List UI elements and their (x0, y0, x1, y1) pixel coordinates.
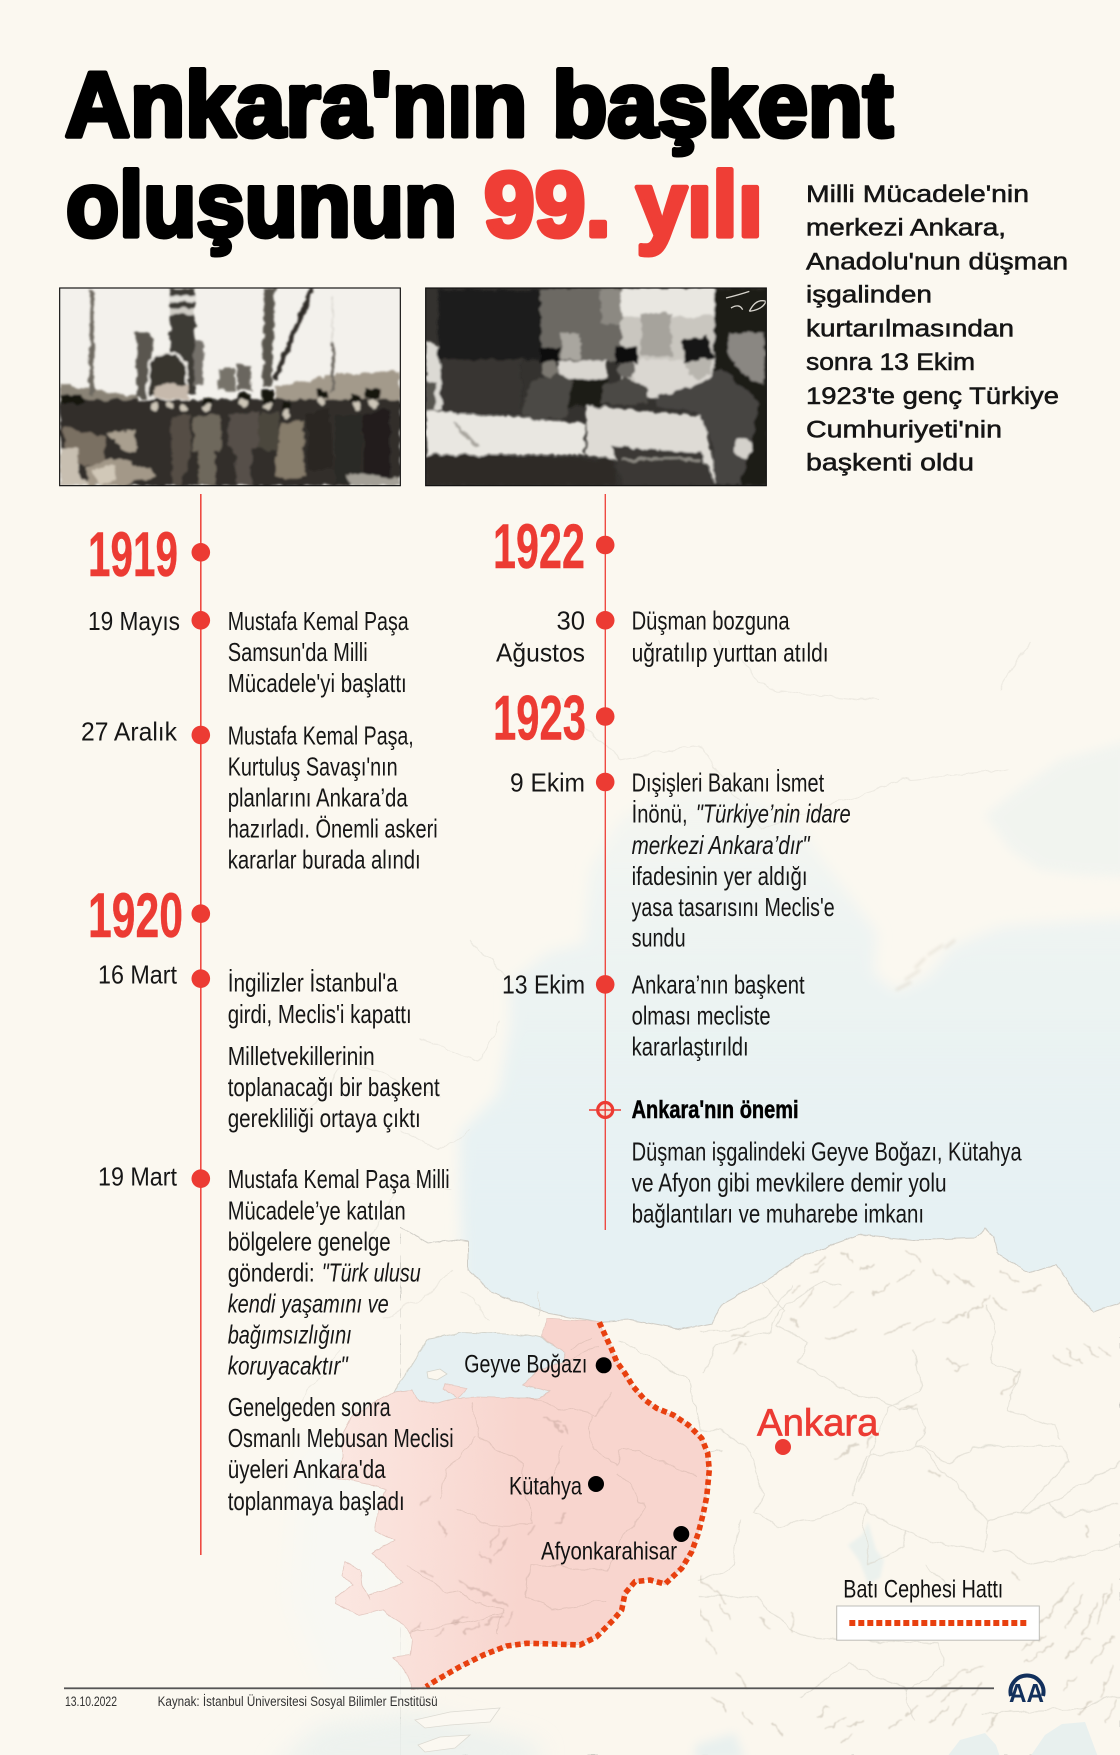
event: 19 Mayıs: Mücadele'yi başlattı (228, 668, 407, 698)
callout: Ankara'nın önemi (632, 1096, 1022, 1229)
land: Turkey (400, 1227, 1120, 1755)
title line 2: oluşunun (66, 154, 457, 256)
sea: Mediterranean (270, 1712, 1098, 1755)
event: 19 Mart: bağımsızlığını (228, 1320, 352, 1350)
title line 1: Ankara'nın başkent (65, 54, 893, 156)
event: 9 Ekim: sundu (632, 923, 686, 953)
event: 16 Mart: Milletvekillerinin (228, 1041, 375, 1071)
event: 13 Ekim: olması mecliste (632, 1000, 771, 1030)
event: 19 Mart: "Türk ulusu (322, 1257, 421, 1287)
event: 9 Ekim: "Türkiye’nin idare (696, 799, 851, 829)
event: 19 Mayıs (88, 606, 409, 698)
intro text: Cumhuriyeti'nin (806, 416, 1002, 443)
city: Afyonkarahisar (541, 1526, 689, 1565)
occupied territory (335, 1318, 709, 1690)
intro text: başkenti oldu (806, 450, 974, 477)
timeline left (81, 494, 454, 1555)
city: Ankara: Ankara (757, 1402, 879, 1444)
event: 9 Ekim (510, 768, 851, 953)
city: Afyonkarahisar: Afyonkarahisar (541, 1537, 677, 1565)
intro text: kurtarılmasından (806, 316, 1014, 343)
intro text: merkezi Ankara, (806, 215, 1006, 242)
sea: Aegean (290, 1440, 420, 1700)
intro text (806, 181, 1068, 477)
event: 19 Mart: Mustafa Kemal Paşa Milli (228, 1164, 450, 1194)
timeline axis (200, 494, 202, 1555)
footer date: 13.10.2022 (65, 1694, 117, 1709)
event: 19 Mart: bölgelere genelge (228, 1226, 391, 1256)
legend: Batı Cephesi Hattı (843, 1575, 1003, 1603)
event: 19 Mart: gönderdi: (228, 1257, 315, 1287)
event: 27 Aralık: hazırladı. Önemli askeri (228, 814, 438, 844)
event: 19 Mart: Genelgeden sonra (228, 1392, 391, 1422)
event: 19 Mart (98, 1161, 454, 1516)
event: 27 Aralık (81, 717, 438, 875)
event: 19 Mart: toplanmaya başladı (228, 1486, 405, 1516)
event: 30 Ağustos: 30 (556, 606, 585, 636)
icon: target marker (589, 1102, 621, 1118)
event: 27 Aralık: kararlar burada alındı (228, 845, 421, 875)
event: 30 Ağustos (496, 606, 829, 667)
intro text: Anadolu'nun düşman (806, 248, 1068, 275)
intro text: sonra 13 Ekim (806, 349, 975, 376)
region fill (335, 1318, 709, 1690)
terrain: Crimea (896, 940, 955, 990)
event: 16 Mart: gerekliliği ortaya çıktı (228, 1103, 421, 1133)
sea: Azov (985, 740, 1120, 877)
event: 9 Ekim: yasa tasarısını Meclis'e (632, 892, 835, 922)
event: 9 Ekim: 9 Ekim (510, 768, 585, 798)
event: 16 Mart (98, 959, 440, 1133)
event: 9 Ekim: merkezi Ankara’dır" (632, 830, 811, 860)
event: 16 Mart: İngilizler İstanbul'a (228, 968, 398, 998)
map background (270, 640, 1120, 1755)
event: 9 Ekim: ifadesinin yer aldığı (632, 861, 808, 891)
callout: Ankara'nın önemi: bağlantıları ve muharebe imkanı (632, 1199, 924, 1229)
legend (837, 1575, 1039, 1640)
year 1919: 1919 (88, 520, 178, 590)
footer rule (64, 1687, 994, 1689)
event: 19 Mart: 19 Mart (98, 1161, 178, 1191)
event: 13 Ekim: kararlaştırıldı (632, 1032, 749, 1062)
event: 19 Mart: Osmanlı Mebusan Meclisi (228, 1423, 454, 1453)
event: 30 Ağustos: Düşman bozguna (632, 606, 790, 636)
callout: Ankara'nın önemi: ve Afyon gibi mevkilere demir yolu (632, 1168, 947, 1198)
event: 13 Ekim: 13 Ekim (502, 969, 585, 999)
timeline right (493, 494, 1022, 1230)
photo: meeting at table (426, 288, 768, 486)
event: 30 Ağustos: uğratılıp yurttan atıldı (632, 637, 829, 667)
intro text: işgalinden (806, 282, 932, 309)
sea: Marmara (393, 1332, 565, 1403)
event: 19 Mart: Mücadele’ye katılan (228, 1195, 406, 1225)
event: 13 Ekim (502, 969, 805, 1062)
logo: AA: AA (1009, 1678, 1044, 1708)
islands (415, 1708, 500, 1752)
event: 19 Mayıs: 19 Mayıs (88, 606, 180, 636)
borders (300, 640, 1120, 1723)
terrain relief (700, 1250, 1117, 1743)
city: Kütahya: Kütahya (509, 1473, 582, 1501)
coast islands (427, 1369, 447, 1380)
event: 27 Aralık: 27 Aralık (81, 717, 178, 747)
front line: Batı Cephesi (426, 1322, 709, 1687)
event: 16 Mart: 16 Mart (98, 959, 178, 989)
callout: Ankara'nın önemi: Ankara'nın önemi (632, 1096, 799, 1124)
event: 27 Aralık: Kurtuluş Savaşı'nın (228, 751, 398, 781)
year 1920: 1920 (88, 881, 183, 951)
event: 19 Mart: üyeleri Ankara'da (228, 1454, 386, 1484)
title highlight: 99. yılı (484, 154, 763, 256)
timeline axis (605, 494, 606, 1230)
intro text: Milli Mücadele'nin (806, 181, 1029, 208)
event: 27 Aralık: planlarını Ankara’da (228, 783, 408, 813)
event: 30 Ağustos: Ağustos (496, 637, 585, 667)
sea: Black Sea (460, 790, 1120, 1400)
photo: crowd at Samsun (60, 288, 400, 486)
event: 16 Mart: girdi, Meclis'i kapattı (228, 999, 412, 1029)
event: 19 Mart: kendi yaşamını ve (228, 1289, 389, 1319)
event: 27 Aralık: Mustafa Kemal Paşa, (228, 720, 414, 750)
event: 19 Mayıs: Mustafa Kemal Paşa (228, 606, 409, 636)
event: 13 Ekim: Ankara’nın başkent (632, 969, 805, 999)
city: Geyve Boğazı: Geyve Boğazı (464, 1350, 587, 1378)
event: 19 Mart: koruyacaktır" (228, 1350, 349, 1380)
event: 9 Ekim: Dışişleri Bakanı İsmet (632, 768, 825, 798)
footer source: Kaynak: İstanbul Üniversitesi Sosyal Bilimler Enstitüsü (158, 1694, 438, 1709)
event: 19 Mayıs: Samsun'da Milli (228, 637, 368, 667)
intro text: 1923'te genç Türkiye (806, 383, 1059, 410)
event: 16 Mart: toplanacağı bir başkent (228, 1072, 440, 1102)
year 1922: 1922 (493, 512, 585, 582)
lake (848, 1522, 884, 1584)
region relief (407, 1337, 697, 1637)
title (65, 54, 893, 256)
map labels (464, 1350, 879, 1565)
event: 9 Ekim: İnönü, (632, 799, 688, 829)
year 1923: 1923 (493, 684, 586, 754)
